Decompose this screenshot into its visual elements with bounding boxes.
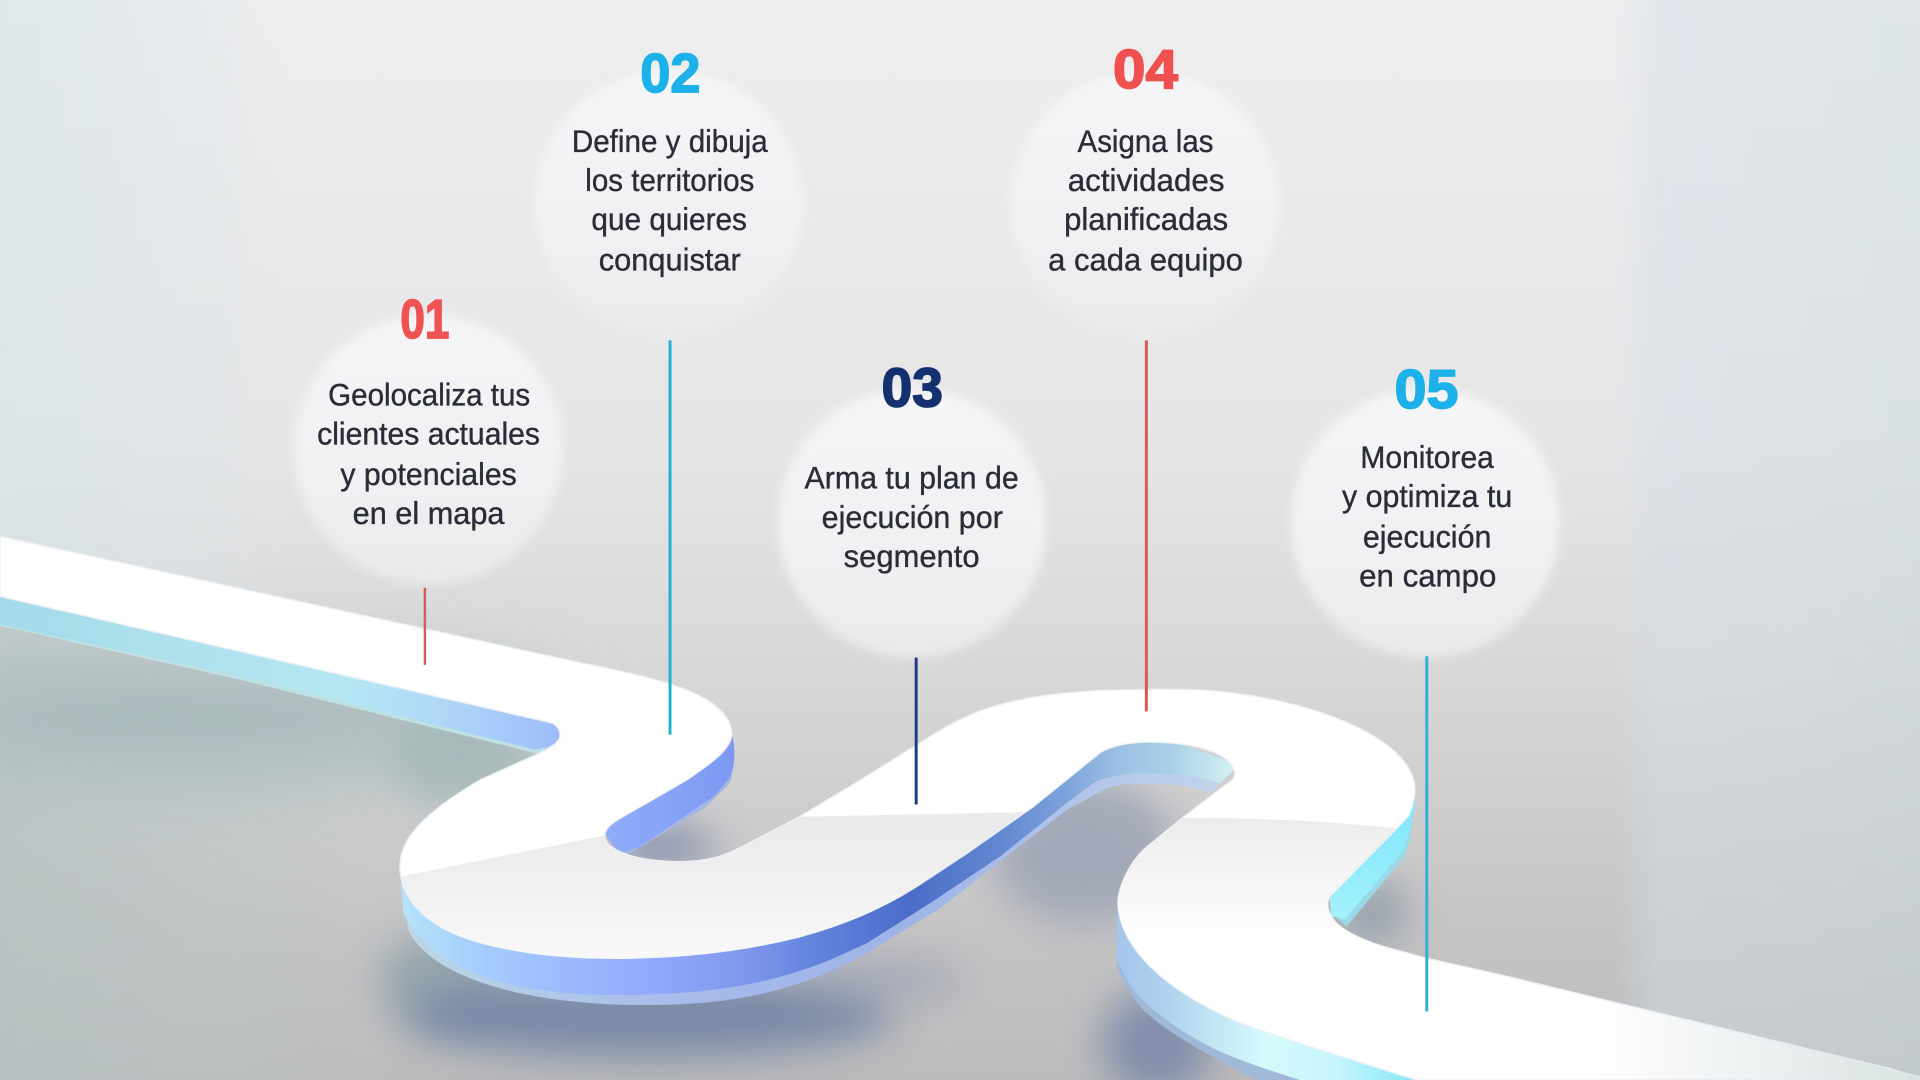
text 01: en el mapa xyxy=(353,496,505,531)
text 01 xyxy=(317,377,540,531)
third bend side face xyxy=(1117,904,1417,1080)
panel: step 02 xyxy=(534,42,803,735)
text 01: Geolocaliza tus xyxy=(328,377,530,412)
text 02 xyxy=(572,124,768,278)
text 02: que quieres xyxy=(591,202,747,237)
second bend side face xyxy=(1330,790,1415,927)
text 05: en campo xyxy=(1359,559,1496,594)
connector 02 xyxy=(669,340,672,735)
number 01: 01 xyxy=(400,288,449,350)
text 03: segmento xyxy=(844,539,980,574)
text 04 xyxy=(1048,124,1243,278)
connector 03 xyxy=(915,658,918,804)
text 05: y optimiza tu xyxy=(1342,479,1512,514)
text 04: Asigna las xyxy=(1078,124,1213,159)
connector 01 xyxy=(424,588,426,665)
bubble 05 xyxy=(1291,388,1560,658)
text 01: clientes actuales xyxy=(317,416,540,451)
number 02: 02 xyxy=(640,42,700,104)
text 02: conquistar xyxy=(599,243,741,278)
text 04: a cada equipo xyxy=(1048,243,1243,278)
bubble 01 xyxy=(294,315,563,584)
number 03: 03 xyxy=(882,357,943,419)
connector 04 xyxy=(1145,340,1148,711)
text 03 xyxy=(804,461,1019,574)
connector 05 xyxy=(1425,656,1428,1011)
left straight side face xyxy=(0,596,560,754)
text 04: planificadas xyxy=(1064,202,1228,237)
bubble 03 xyxy=(778,388,1047,658)
text 03: ejecución por xyxy=(822,500,1003,535)
ground shadows xyxy=(0,655,1408,1080)
text 05 xyxy=(1342,440,1512,594)
text 04: actividades xyxy=(1068,163,1224,198)
main curve and diagonal side face xyxy=(400,732,1239,1005)
road: top surface xyxy=(0,536,1920,1080)
road: side faces xyxy=(0,596,1417,1080)
text 05: ejecución xyxy=(1363,519,1491,554)
text 01: y potenciales xyxy=(340,457,517,492)
panel: step 05 xyxy=(1291,358,1560,1011)
panel: step 04 xyxy=(1010,38,1280,711)
bubble 02 xyxy=(534,70,803,339)
text 03: Arma tu plan de xyxy=(804,461,1019,496)
text 05: Monitorea xyxy=(1360,440,1494,475)
bubble 04 xyxy=(1010,70,1280,339)
number 05: 05 xyxy=(1395,358,1458,420)
text 02: Define y dibuja xyxy=(572,124,768,159)
number 04: 04 xyxy=(1113,38,1178,100)
panel: step 01 xyxy=(294,288,563,665)
first bend side face xyxy=(600,732,734,853)
text 02: los territorios xyxy=(585,163,754,198)
panel: step 03 xyxy=(778,357,1047,804)
